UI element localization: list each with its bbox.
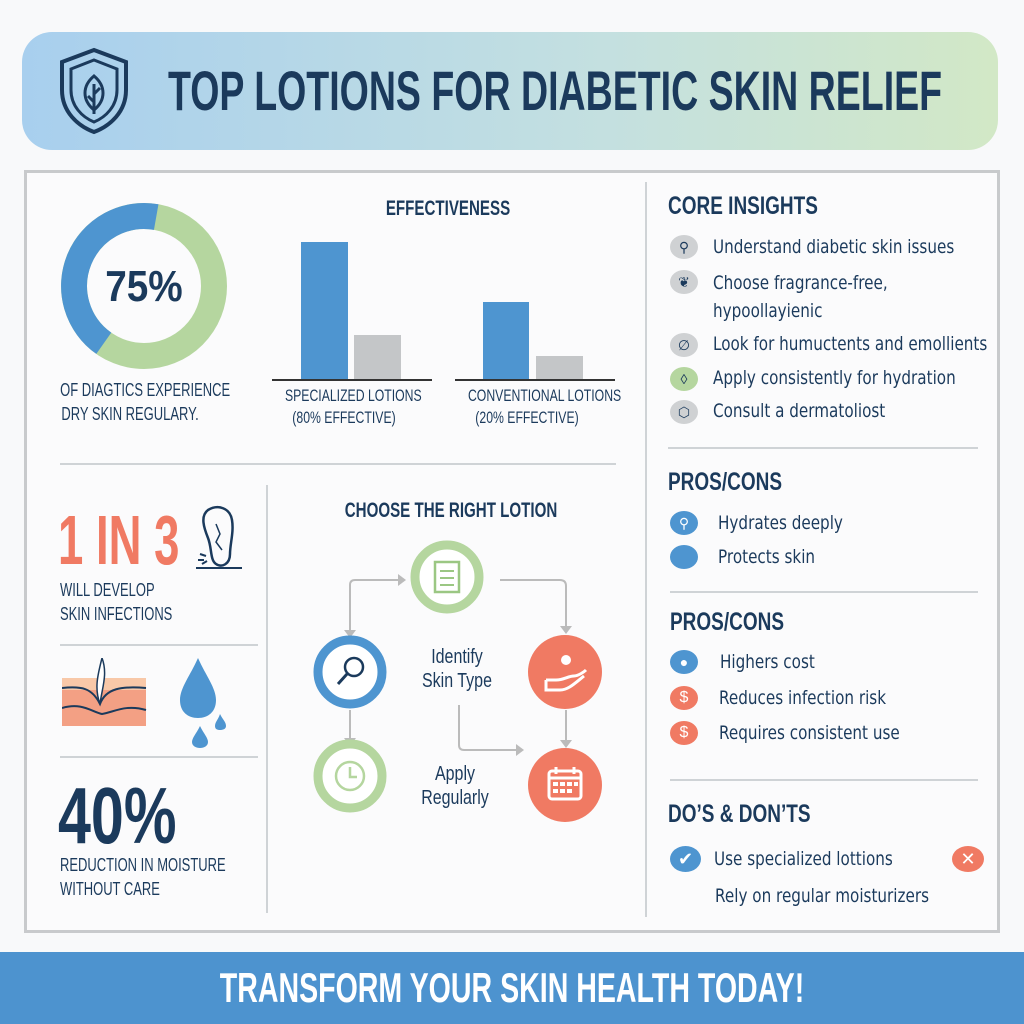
footer banner (0, 952, 1024, 1024)
panel: cons: PROS/CONS (670, 608, 784, 636)
panel: core insights: ◊ (681, 371, 687, 387)
bar chart: effectiveness (272, 197, 621, 427)
panel: pros (668, 468, 843, 569)
bar chart: effectiveness: (80% EFFECTIVE) (292, 408, 396, 427)
panel: cons: ● (680, 654, 688, 670)
flowchart: choose the right lotion: Skin Type (422, 670, 492, 692)
panel: core insights: CORE INSIGHTS (668, 192, 818, 220)
donut caption (60, 380, 230, 424)
node: checklist (415, 545, 479, 609)
main panel (24, 170, 1000, 933)
donut chart 75% (60, 203, 230, 424)
panel: core insights: hypoollayienic (713, 300, 822, 322)
panel: core insights: Look for humuctents and emollients (713, 333, 987, 355)
panel: do's and don'ts: ✔ (678, 849, 693, 869)
node: calendar (528, 748, 602, 822)
panel: do's and don'ts: Use specialized lottions (714, 848, 893, 870)
panel: cons: $ (680, 724, 688, 741)
panel: core insights: Understand diabetic skin issues (713, 236, 954, 258)
panel: pros: PROS/CONS (668, 468, 782, 496)
panel: do's and don'ts: ✕ (960, 849, 976, 869)
stat: 40%: WITHOUT CARE (60, 879, 160, 899)
panel: core insights: Consult a dermatoliost (713, 400, 885, 422)
footer banner: TRANSFORM YOUR SKIN HEALTH TODAY! (220, 964, 804, 1011)
panel: cons: Requires consistent use (719, 722, 900, 744)
panel: do's and don'ts: DO’S & DON’TS (668, 800, 811, 828)
panel: pros: Hydrates deeply (718, 512, 843, 534)
donut caption: DRY SKIN REGULARY. (61, 404, 199, 424)
stat: 40% (58, 771, 226, 899)
bar chart: effectiveness: EFFECTIVENESS (386, 197, 510, 220)
stat: 1 in 3: WILL DEVELOP (60, 580, 155, 600)
header banner (22, 32, 998, 150)
panel: cons (670, 608, 900, 745)
flowchart: choose the right lotion (314, 499, 602, 822)
panel: do's and don'ts (668, 800, 984, 907)
panel: core insights: Apply consistently for hydration (713, 367, 956, 389)
donut chart 75%: 75% (105, 262, 183, 311)
icon: shield leaf (60, 48, 128, 134)
flowchart: choose the right lotion: CHOOSE THE RIGHT LOTION (345, 499, 557, 522)
stat: 1 in 3: SKIN INFECTIONS (60, 604, 172, 624)
flowchart: choose the right lotion: Identify (431, 646, 483, 668)
bar chart: effectiveness: (20% EFFECTIVE) (475, 408, 579, 427)
panel: pros: ⚲ (679, 515, 689, 531)
panel: core insights: Choose fragrance-free, (713, 272, 888, 294)
title: TOP LOTIONS FOR DIABETIC SKIN RELIEF (168, 59, 942, 122)
flowchart: choose the right lotion: Apply (435, 763, 475, 785)
stat: 40%: 40% (58, 771, 176, 860)
panel: cons: Highers cost (720, 651, 815, 673)
node: magnifier (318, 640, 382, 704)
panel: cons: Reduces infection risk (719, 687, 886, 709)
icon: cracked foot (196, 506, 242, 569)
stat: 1 in 3: 1 IN 3 (58, 501, 179, 579)
panel: core insights: ⚲ (679, 239, 689, 255)
flowchart: choose the right lotion: Regularly (421, 787, 489, 809)
stat: 40%: REDUCTION IN MOISTURE (60, 855, 226, 875)
panel: pros: Protects skin (718, 546, 815, 568)
bar chart: effectiveness: SPECIALIZED LOTIONS (285, 386, 422, 405)
panel: core insights (668, 192, 987, 424)
stat: 1 in 3 (58, 501, 242, 624)
icon: water drops (180, 658, 226, 748)
node: hand lotion (528, 635, 602, 709)
donut caption: OF DIAGTICS EXPERIENCE (60, 380, 230, 400)
panel: core insights: ∅ (678, 337, 690, 353)
panel: core insights: ⬡ (678, 404, 690, 420)
icon: skin cross-section (62, 658, 146, 726)
panel: core insights: ❦ (678, 274, 690, 290)
panel: cons: $ (680, 689, 688, 706)
panel: do's and don'ts: Rely on regular moisturizers (715, 885, 929, 907)
node: clock (318, 744, 382, 808)
bar chart: effectiveness: CONVENTIONAL LOTIONS (468, 386, 621, 405)
